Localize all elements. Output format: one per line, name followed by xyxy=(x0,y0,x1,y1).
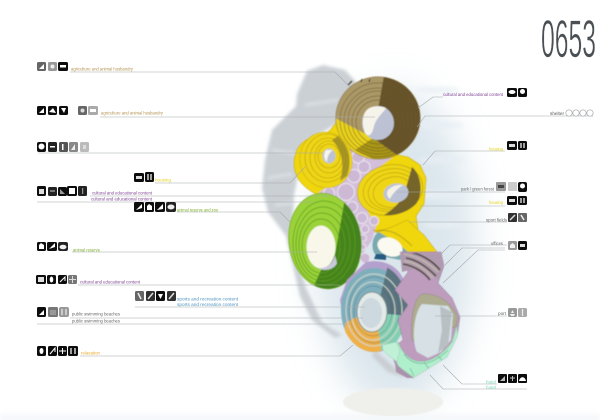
labels: public swimming beaches xyxy=(72,312,121,316)
lavender bubble field xyxy=(318,140,392,263)
icon row: cultural xyxy=(37,186,87,196)
icon row: sport fields xyxy=(508,213,527,222)
labels: park / green forest xyxy=(461,186,495,192)
icon row: public beaches xyxy=(37,307,69,317)
labels: agriculture and animal husbandry xyxy=(71,66,134,72)
icon row: agriculture 2 xyxy=(37,106,98,115)
labels: hotel xyxy=(486,385,496,390)
icon row: sports left xyxy=(135,291,176,301)
icon row: cultural lower xyxy=(36,275,77,284)
icon row: animal reserve xyxy=(37,242,68,251)
labels: public swimming beaches xyxy=(72,318,121,324)
leader lines xyxy=(37,72,593,389)
labels: sports and recreation content xyxy=(177,302,239,307)
icon row: housing left xyxy=(134,172,154,182)
labels: cultural and educational content xyxy=(91,196,153,202)
lower teal crater xyxy=(340,261,410,355)
labels: cultural and educational content xyxy=(443,92,504,97)
icon row: forest and recreation xyxy=(37,142,89,152)
labels: sports and recreation content xyxy=(177,296,239,302)
labels: animal reserve xyxy=(73,248,100,252)
labels: housing xyxy=(489,200,503,205)
cast shadow of island xyxy=(262,65,405,378)
icon row: housing right xyxy=(507,141,527,150)
right yellow crater xyxy=(353,159,427,221)
brown terraced crater xyxy=(334,76,422,160)
icon row: animal reserve and zoo xyxy=(134,202,176,212)
labels: hotel xyxy=(486,380,496,384)
icon row: port xyxy=(508,308,527,317)
labels: relaxation xyxy=(81,350,100,356)
green crater xyxy=(288,192,362,290)
icon row: offices xyxy=(508,241,527,250)
icon row: agriculture 1 xyxy=(37,62,68,71)
labels xyxy=(71,66,564,390)
labels: offices xyxy=(491,241,504,246)
icon row: park xyxy=(496,182,527,192)
lower yellow wing and crater xyxy=(372,220,437,260)
labels: housing xyxy=(155,178,171,182)
labels: housing xyxy=(489,146,503,152)
icon: shelter circles xyxy=(566,110,593,116)
labels: animal reserve and zoo xyxy=(177,208,218,212)
icon row: relaxation xyxy=(37,346,78,356)
ground shadow ellipse xyxy=(343,388,443,416)
left yellow crater xyxy=(294,126,358,194)
labels: shelter xyxy=(550,111,564,116)
icon row: cultural right xyxy=(507,88,527,97)
island structure xyxy=(283,70,460,378)
labels: port xyxy=(498,311,507,316)
labels: cultural and educational content xyxy=(92,190,153,196)
labels: agriculture and animal husbandry xyxy=(101,110,164,116)
icon row: housing right 2 xyxy=(507,196,527,205)
labels: sport fields xyxy=(486,218,508,222)
icon row: hotel xyxy=(498,374,527,383)
labels: cultural and educational content xyxy=(80,280,141,284)
mauve crater with mint ring xyxy=(382,252,460,378)
yellow landform xyxy=(294,120,426,232)
